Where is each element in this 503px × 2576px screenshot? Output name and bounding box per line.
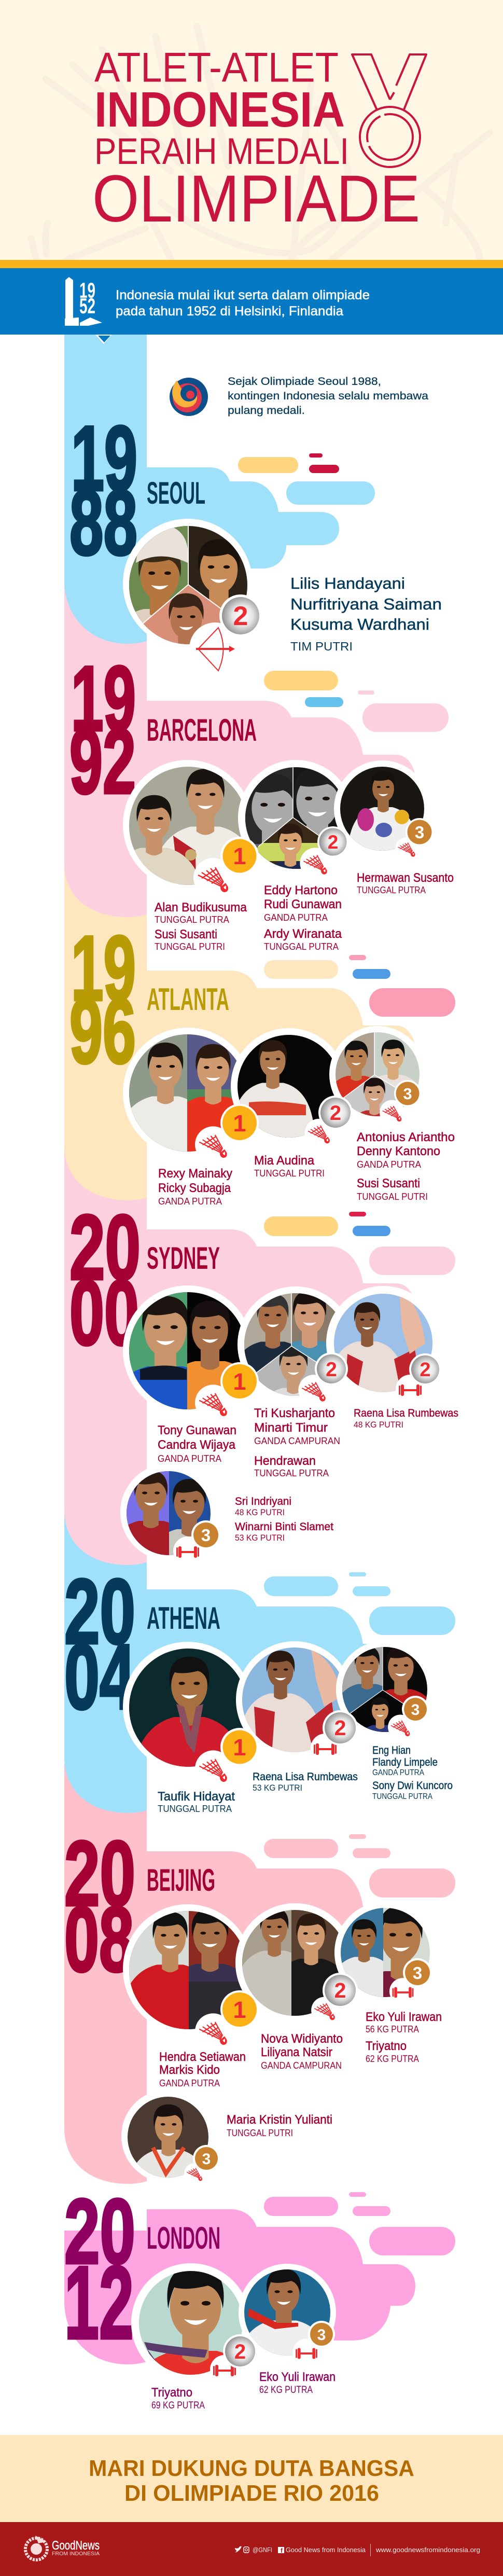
year 1988 xyxy=(69,407,137,574)
athlete names xyxy=(290,574,442,653)
intro text xyxy=(116,288,370,318)
panel: call to action xyxy=(0,2435,503,2522)
athlete text: gold: Taufik Hidayat xyxy=(158,1790,235,1804)
year 2008: 20 xyxy=(64,1822,135,1925)
athlete photo: Antonius, Denny, Susi xyxy=(329,1026,420,1116)
year 2000: 00 xyxy=(69,1261,139,1364)
athlete text: gold: Ricky Subagja xyxy=(158,1181,231,1195)
medal: silver: 2 xyxy=(233,601,248,631)
medal: bronze xyxy=(394,1080,421,1107)
year 2000: 20 xyxy=(69,1196,141,1299)
medal: bronze xyxy=(308,2321,335,2348)
icon: shuttlecock xyxy=(311,1997,338,2024)
medal: bronze: 3 xyxy=(411,1701,420,1719)
intro text: kontingen Indonesia selalu membawa xyxy=(228,390,428,402)
athlete text: bronze: Eko Yuli Irawan xyxy=(259,2370,336,2384)
athlete text: bronze: TUNGGAL PUTRA xyxy=(357,885,426,895)
medal: bronze xyxy=(406,818,434,846)
athlete photo: Taufik xyxy=(123,1642,244,1767)
athlete text: silver: Rudi Gunawan xyxy=(264,897,342,911)
medal: bronze xyxy=(403,1958,432,1987)
athlete text: gold: Alan Budikusuma xyxy=(155,901,247,915)
athlete text: gold: TUNGGAL PUTRA xyxy=(158,1804,232,1814)
year 2008: 08 xyxy=(64,1888,134,1991)
panel: 1988 Seoul xyxy=(71,377,441,672)
athlete text: gold xyxy=(155,901,247,952)
athlete text: silver: Liliyana Natsir xyxy=(261,2045,332,2059)
panel: 2000 Sydney xyxy=(71,1212,458,1558)
title: OLIMPIADE xyxy=(92,162,420,236)
decorative pills xyxy=(264,1212,455,1275)
athlete photo: Eko and Triyatno xyxy=(334,1906,430,1997)
panel: 2012 London xyxy=(65,2192,455,2408)
athlete text: silver: Tri Kusharjanto xyxy=(254,1406,335,1420)
icon: social media xyxy=(235,2546,284,2554)
social text: www.goodnewsfromindonesia.org xyxy=(375,2546,480,2554)
athlete photo: Raena xyxy=(236,1641,342,1752)
year 2004: 04 xyxy=(64,1625,135,1728)
icon: shuttlecock xyxy=(298,1375,329,1406)
athlete text: gold: GANDA PUTRA xyxy=(159,2078,220,2088)
medal: silver xyxy=(323,1973,358,2008)
athlete names: Kusuma Wardhani xyxy=(290,615,429,633)
panel: 1996 Atlanta xyxy=(71,934,455,1204)
athlete text: bronze badminton: Maria Kristin Yulianti xyxy=(227,2113,332,2127)
icon: shuttlecock xyxy=(184,2163,205,2184)
blob xyxy=(147,467,339,569)
athlete text: silver xyxy=(254,1154,325,1179)
medal: silver xyxy=(315,1352,348,1386)
year 2004: 20 xyxy=(64,1560,135,1663)
athlete text: gold: Tony Gunawan xyxy=(158,1423,236,1437)
medal: bronze xyxy=(402,1696,429,1723)
timeline column backgrounds xyxy=(64,335,147,2364)
panel: footer xyxy=(0,2522,503,2576)
year 1992 xyxy=(69,647,136,813)
icon: shuttlecock xyxy=(388,1715,413,1739)
icon: pointer xyxy=(95,335,112,344)
athlete photo: Mia xyxy=(231,1028,335,1138)
medal: silver: 2 xyxy=(420,1359,431,1381)
athlete text: gold xyxy=(158,1423,236,1464)
year 1992: 19 xyxy=(71,647,136,750)
medal: silver: 2 xyxy=(330,1102,341,1125)
blob xyxy=(147,1229,415,1344)
athlete text: bronze: Winarni Binti Slamet xyxy=(235,1521,333,1533)
athlete photo: Alan and Susi xyxy=(123,760,244,885)
year 2004 xyxy=(64,1560,135,1728)
year 2008 xyxy=(64,1822,135,1991)
athlete text: gold: Candra Wijaya xyxy=(158,1438,236,1452)
decorative pills xyxy=(264,1572,455,1635)
city heading: ATLANTA xyxy=(147,982,229,1017)
medal: gold xyxy=(220,837,259,875)
athlete text: silver: GANDA CAMPURAN xyxy=(254,1436,340,1446)
athlete text: silver: TUNGGAL PUTRI xyxy=(254,1168,325,1179)
athlete photo: Rexy and Ricky xyxy=(123,1028,241,1152)
icon: dumbbell xyxy=(389,1978,416,2005)
social text: @GNFI xyxy=(253,2546,272,2554)
athlete photo: Maria xyxy=(121,2095,208,2178)
year 1996: 96 xyxy=(69,979,136,1083)
social text: Good News from Indonesia xyxy=(286,2546,366,2554)
year 2012: 12 xyxy=(64,2245,134,2361)
athlete text: bronze: GANDA PUTRA xyxy=(357,1159,421,1170)
athlete text: bronze: Triyatno xyxy=(366,2039,407,2053)
title: ATLET-ATLET xyxy=(94,45,339,91)
athlete photo: Hermawan xyxy=(334,760,424,851)
medal: gold: 1 xyxy=(233,843,246,869)
title: INDONESIA xyxy=(94,82,345,137)
icon: archery bow xyxy=(189,622,241,674)
athlete text: gold: GANDA PUTRA xyxy=(158,1196,222,1207)
athlete text: bronze: Antonius Ariantho xyxy=(357,1130,455,1144)
medal: gold xyxy=(220,1728,259,1766)
blob xyxy=(147,2209,415,2340)
athlete text: bronze: GANDA PUTRA xyxy=(372,1768,424,1777)
medal: silver: 2 xyxy=(326,1359,337,1381)
athlete text: bronze: Denny Kantono xyxy=(357,1144,440,1158)
medal: bronze: 3 xyxy=(415,823,424,842)
athlete text: silver: TUNGGAL PUTRA xyxy=(264,941,339,952)
medal: silver xyxy=(323,1710,358,1746)
medal: silver xyxy=(317,826,348,857)
athlete photo xyxy=(123,519,251,644)
athlete text: silver weightlifting xyxy=(354,1407,458,1430)
athlete text: bronze badminton: TUNGGAL PUTRI xyxy=(227,2128,293,2138)
panel: call to action: DI OLIMPIADE RIO 2016 xyxy=(124,2481,379,2506)
decorative pills xyxy=(264,1834,455,1898)
icon: seoul logo xyxy=(170,378,208,416)
icon: shuttlecock xyxy=(305,1119,333,1147)
title xyxy=(92,45,420,236)
medal: gold: 1 xyxy=(233,1997,246,2023)
athlete text: silver xyxy=(264,883,342,952)
athlete text: bronze: 62 KG PUTRA xyxy=(366,2054,419,2064)
athlete names: Lilis Handayani xyxy=(290,574,405,592)
athlete text: bronze xyxy=(259,2370,336,2395)
athlete text: bronze: 56 KG PUTRA xyxy=(366,2024,419,2034)
athlete text: bronze xyxy=(235,1495,333,1543)
logo: GoodNews from Indonesia: GoodNews xyxy=(52,2539,100,2553)
athlete text: bronze: 62 KG PUTRA xyxy=(259,2385,313,2395)
medal: gold xyxy=(220,1362,259,1401)
panel: 2008 Beijing xyxy=(65,1834,455,2181)
athlete text: gold xyxy=(158,1790,235,1814)
athlete text: silver xyxy=(151,2386,205,2411)
year 2012: 20 xyxy=(64,2180,135,2283)
medal: bronze: 3 xyxy=(202,2151,211,2168)
athlete text: gold: Hendra Setiawan xyxy=(159,2050,246,2064)
medal: gold: 1 xyxy=(233,1734,246,1761)
athlete photo: Hendra and Markis xyxy=(123,1904,243,2029)
icon: dumbbell xyxy=(173,1536,202,1566)
medal: gold xyxy=(220,1104,259,1142)
icon: shuttlecock xyxy=(195,2013,231,2049)
athlete photo: Eddy, Rudi, Ardy xyxy=(238,760,342,869)
logo: GoodNews from Indonesia: FROM INDONESIA xyxy=(52,2551,100,2557)
year 1988: 19 xyxy=(71,407,137,510)
panel: 2004 Athena xyxy=(65,1572,455,1812)
icon: dumbbell xyxy=(311,1734,340,1763)
intro text: pada tahun 1952 di Helsinki, Finlandia xyxy=(116,304,343,318)
intro text: pulang medali. xyxy=(228,405,305,417)
athlete text: silver: Minarti Timur xyxy=(254,1421,328,1435)
athlete text: gold: TUNGGAL PUTRI xyxy=(155,941,225,952)
medal: gold: 1 xyxy=(233,1368,246,1395)
city heading: SYDNEY xyxy=(147,1241,220,1276)
athlete text: bronze: 48 KG PUTRI xyxy=(235,1507,285,1517)
athlete text: bronze: TUNGGAL PUTRA xyxy=(372,1792,432,1801)
athlete text: silver: TUNGGAL PUTRA xyxy=(254,1468,329,1478)
medal: silver: 2 xyxy=(334,1716,346,1740)
medal: bronze xyxy=(191,1520,220,1549)
athlete text: silver xyxy=(254,1406,340,1478)
medal: bronze xyxy=(193,2145,220,2172)
athlete names: TIM PUTRI xyxy=(290,640,353,653)
icon: shuttlecock xyxy=(193,858,233,897)
year 1988: 88 xyxy=(69,471,137,574)
medal: silver xyxy=(318,1096,353,1130)
icon: medal xyxy=(352,54,426,167)
athlete photo: Tony and Candra xyxy=(123,1285,244,1409)
icon: helsinki stadium tower: 19 xyxy=(79,278,95,302)
logo: GoodNews from Indonesia xyxy=(25,2536,100,2560)
decorative pills xyxy=(264,2192,455,2255)
athlete text: silver: Eddy Hartono xyxy=(264,883,338,897)
decorative pills xyxy=(264,671,449,732)
icon: shuttlecock xyxy=(380,1100,404,1125)
athlete text: bronze xyxy=(357,871,454,895)
icon: social media: f xyxy=(281,2547,283,2554)
athlete text: gold: TUNGGAL PUTRA xyxy=(155,915,229,925)
athlete photo: Eng Hian, Flandy, Sony xyxy=(336,1644,427,1732)
athlete text: silver: 53 KG PUTRI xyxy=(253,1783,302,1793)
intro text: Indonesia mulai ikut serta dalam olimpiade xyxy=(116,288,370,302)
panel: 1952 intro band xyxy=(0,268,503,335)
year 1996: 19 xyxy=(71,917,136,1020)
athlete text: bronze: TUNGGAL PUTRI xyxy=(357,1192,428,1202)
panel: 1992 Barcelona xyxy=(71,664,453,950)
blob xyxy=(147,971,415,1074)
icon: shuttlecock xyxy=(195,1126,231,1162)
athlete text: gold: Susi Susanti xyxy=(155,927,217,941)
medal: bronze: 3 xyxy=(201,1526,211,1545)
medal: silver xyxy=(409,1353,441,1386)
medal: silver xyxy=(219,594,262,637)
athlete text: silver weightlifting: Raena Lisa Rumbewas xyxy=(354,1407,458,1419)
athlete text: silver: Triyatno xyxy=(151,2386,192,2400)
athlete text: gold xyxy=(159,2050,246,2088)
athlete text: gold: GANDA PUTRA xyxy=(158,1453,221,1464)
athlete text: bronze: Eng Hian xyxy=(372,1744,411,1756)
social text xyxy=(253,2544,480,2556)
athlete photo: Sri and Winarni xyxy=(120,1469,211,1555)
athlete photo: Triyatno xyxy=(131,2263,244,2375)
athlete text: silver: Hendrawan xyxy=(254,1454,316,1468)
icon: helsinki stadium tower xyxy=(65,277,102,326)
athlete text: silver: Ardy Wiranata xyxy=(264,927,342,941)
city heading: BEIJING xyxy=(147,1863,215,1898)
athlete text: silver: Mia Audina xyxy=(254,1154,315,1168)
panel: orange strip xyxy=(0,260,503,268)
blob xyxy=(147,701,415,809)
city heading: LONDON xyxy=(147,2221,220,2255)
medal: bronze: 3 xyxy=(317,2326,326,2344)
athlete text: bronze badminton xyxy=(227,2113,332,2138)
athlete names: Nurfitriyana Saiman xyxy=(290,595,442,613)
athlete text: bronze: Sony Dwi Kuncoro xyxy=(372,1780,453,1792)
medal: silver xyxy=(223,2334,257,2369)
icon: shuttlecock xyxy=(395,837,418,860)
icon: dumbbell xyxy=(210,2355,239,2384)
title: PERAIH MEDALI xyxy=(94,131,349,172)
icon: shuttlecock xyxy=(195,1750,231,1786)
athlete photo: Raena xyxy=(326,1286,432,1392)
icon: helsinki stadium tower: 52 xyxy=(79,294,95,318)
medal: gold xyxy=(220,1990,259,2029)
blob xyxy=(147,1589,415,1686)
athlete text: bronze: Hermawan Susanto xyxy=(357,871,454,885)
year 2012 xyxy=(64,2180,135,2361)
medal: gold: 1 xyxy=(233,1110,246,1137)
medal: bronze: 3 xyxy=(403,1085,412,1103)
icon: shuttlecock xyxy=(195,1384,231,1421)
panel: call to action: MARI DUKUNG DUTA BANGSA xyxy=(89,2456,414,2481)
athlete text: silver: Nova Widiyanto xyxy=(261,2032,343,2046)
athlete text: bronze: Sri Indriyani xyxy=(235,1495,291,1507)
icon: dumbbell xyxy=(292,2338,320,2366)
blob xyxy=(147,1851,415,1956)
medal: bronze: 3 xyxy=(413,1963,422,1983)
intro text: Sejak Olimpiade Seoul 1988, xyxy=(228,376,381,387)
panel: header xyxy=(0,0,503,260)
icon: shuttlecock xyxy=(300,848,331,879)
athlete photo: Nova and Liliyana xyxy=(235,1903,342,2016)
athlete text: silver xyxy=(253,1771,358,1793)
athlete photo: Eko xyxy=(239,2264,336,2356)
athlete text: bronze xyxy=(366,2010,442,2064)
city heading: BARCELONA xyxy=(147,713,257,747)
athlete text: bronze: Flandy Limpele xyxy=(372,1756,438,1768)
athlete text: gold: Markis Kido xyxy=(159,2063,220,2077)
athlete text: bronze: Susi Susanti xyxy=(357,1176,420,1190)
decorative pills xyxy=(264,955,455,1017)
athlete photo: Tri, Minarti, Hendrawan xyxy=(237,1286,339,1396)
medal: silver: 2 xyxy=(234,2340,246,2363)
athlete text: silver: GANDA CAMPURAN xyxy=(261,2060,342,2071)
athlete text: bronze: 53 KG PUTRI xyxy=(235,1533,285,1543)
year 1996 xyxy=(69,917,136,1083)
athlete text: silver xyxy=(261,2032,343,2071)
city heading: ATHENA xyxy=(147,1601,220,1636)
athlete text: gold xyxy=(158,1167,232,1207)
athlete text: silver: 69 KG PUTRA xyxy=(151,2400,205,2411)
icon: dumbbell xyxy=(396,1375,425,1404)
city heading: SEOUL xyxy=(147,476,205,510)
year 1992: 92 xyxy=(69,710,136,813)
athlete text: gold: Rexy Mainaky xyxy=(158,1167,232,1181)
athlete text: bronze xyxy=(357,1130,455,1202)
athlete text: bronze: Eko Yuli Irawan xyxy=(366,2010,442,2024)
athlete text: silver: Raena Lisa Rumbewas xyxy=(253,1771,358,1783)
athlete text: silver weightlifting: 48 KG PUTRI xyxy=(354,1420,403,1430)
athlete text: bronze xyxy=(372,1744,453,1801)
decorative pills xyxy=(238,453,375,505)
medal: silver: 2 xyxy=(334,1978,346,2002)
intro text xyxy=(228,376,428,417)
medal: silver: 2 xyxy=(328,832,338,853)
year 2000 xyxy=(69,1196,141,1364)
athlete text: silver: GANDA PUTRA xyxy=(264,912,328,923)
